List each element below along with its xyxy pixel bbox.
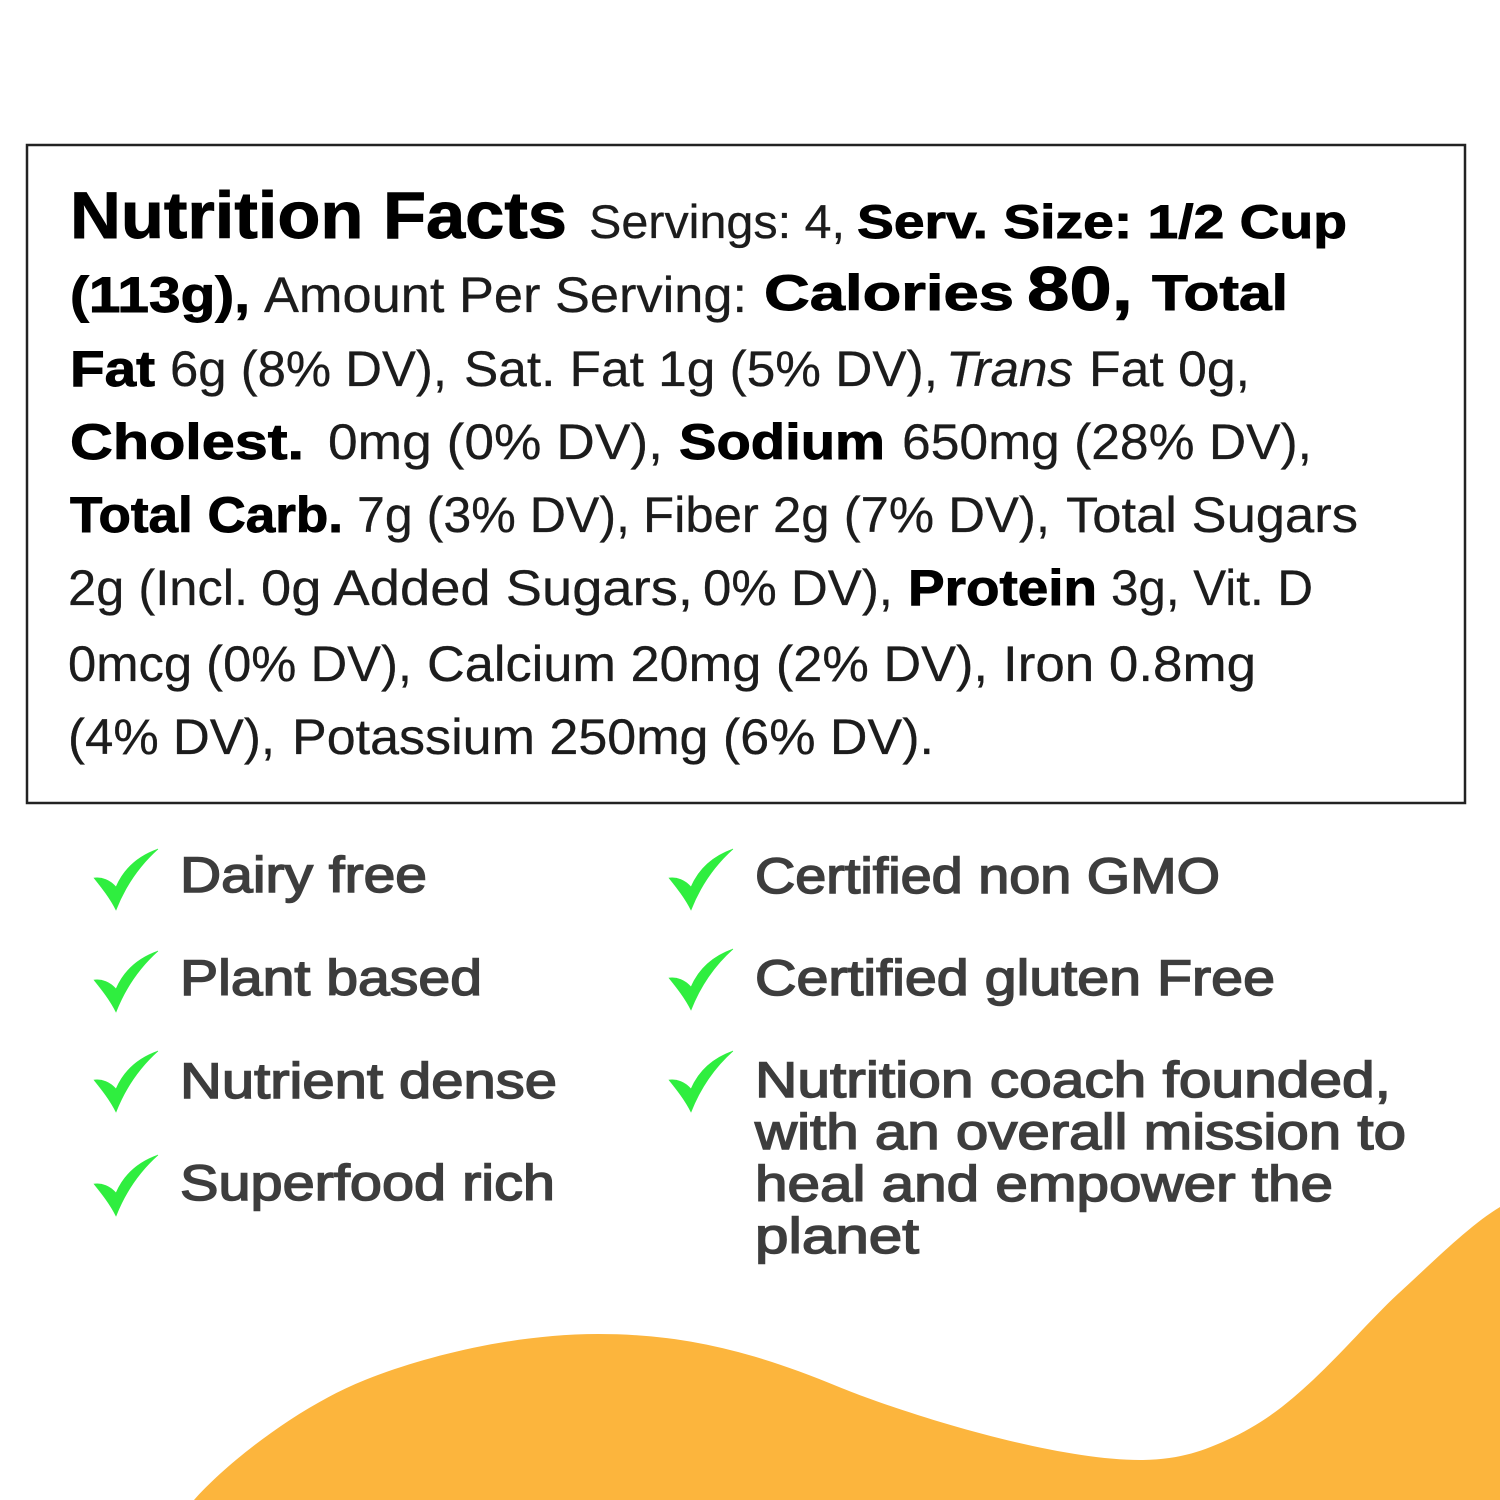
text: line 6: 0% DV), [703,560,893,616]
text: nutrition coach mission: with an overall mission to [754,1104,1406,1160]
text: line 2: Total [1152,265,1288,321]
text: line 5: 7g (3% DV), [357,487,630,543]
text: nutrition coach mission: Nutrition coach founded, [755,1052,1391,1108]
text: line 7 [68,636,1256,692]
text: line 1 [589,195,1347,248]
icon: check dairy free [94,849,158,910]
text: line 1: Serv. Size: 1/2 Cup [857,195,1347,248]
text: line 3: Sat. Fat 1g (5% DV), [464,341,938,397]
panel: left benefits list [94,847,557,1216]
icon: check plant based [94,951,158,1012]
text: line 2: (113g), [70,267,250,323]
text: line 3: Fat 0g, [1089,341,1250,397]
text: line 4: Cholest. [70,414,304,470]
text: line 5: Fiber 2g (7% DV), [643,487,1050,543]
text: certified non GMO: Certified non GMO [755,848,1220,904]
text: plant based: Plant based [180,950,482,1006]
text: line 7: Iron 0.8mg [1003,636,1256,692]
panel: nutrition facts box [27,145,1465,803]
text: line 5: Total Carb. [70,487,343,543]
text: superfood rich: Superfood rich [180,1155,555,1211]
orange wave [194,1207,1500,1500]
text: line 2: Calories [764,265,1014,321]
text: line 3: 6g (8% DV), [170,341,447,397]
text: line 1: Servings: 4, [589,195,845,248]
text: line 8: (4% DV), [68,709,275,765]
icon: check superfood rich [94,1155,158,1216]
text: line 5: Total Sugars [1066,487,1358,543]
text: line 3: Trans [946,341,1073,397]
text: line 2 [70,255,1288,324]
text: line 4 [70,414,1312,470]
text: line 4: 650mg (28% DV), [902,414,1312,470]
text: nutrition coach mission: planet [755,1208,919,1264]
text: line 4: Sodium [679,414,885,470]
text: line 6: 3g, Vit. D [1111,560,1313,616]
text: line 2: 80, [1027,255,1133,324]
icon: check nutrient dense [94,1051,158,1112]
text: line 5 [70,487,1358,543]
text: line 3 [70,341,1250,397]
text: line 6 [68,560,1313,616]
heading: nutrition facts: Nutrition Facts [70,178,567,252]
text: dairy free: Dairy free [180,847,427,903]
text: nutrient dense: Nutrient dense [180,1053,557,1109]
panel: right benefits list [669,848,1406,1264]
text: line 6: 0g Added Sugars, [261,560,693,616]
text: line 8: Potassium 250mg (6% DV). [292,709,934,765]
icon: check nutrition coach [669,1051,733,1112]
text: line 4: 0mg (0% DV), [328,414,663,470]
text: line 7: 0mcg (0% DV), [68,636,412,692]
icon: check non GMO [669,849,733,910]
text: line 3: Fat [70,341,155,397]
text: nutrition coach mission [754,1052,1406,1264]
text: certified gluten free: Certified gluten Free [755,950,1275,1006]
text: line 6: Protein [908,560,1097,616]
text: nutrition coach mission: heal and empower the [755,1156,1333,1212]
text: line 2: Amount Per Serving: [264,267,747,323]
icon: check gluten free [669,949,733,1010]
text: line 6: 2g (Incl. [68,560,248,616]
text: line 7: Calcium 20mg (2% DV), [427,636,988,692]
